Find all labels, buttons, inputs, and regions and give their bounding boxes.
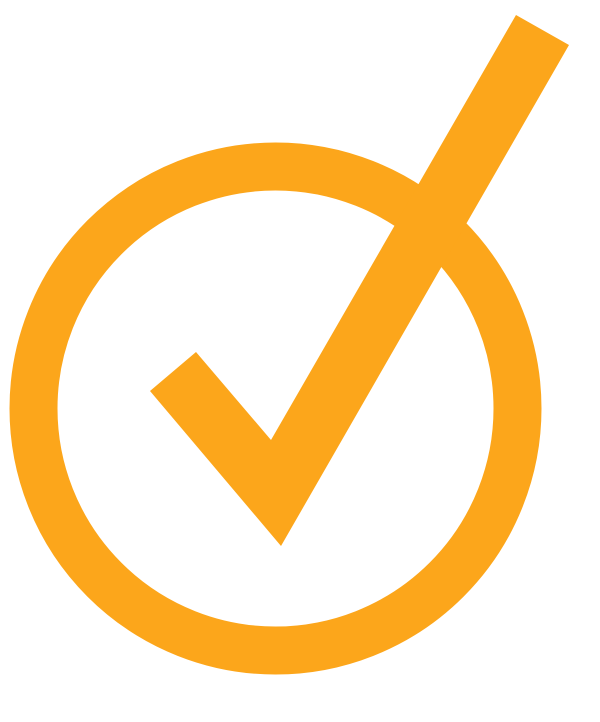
- icon: circle ring: [34, 166, 518, 650]
- icon: check mark: [150, 15, 569, 546]
- icon: check mark in circle: [34, 15, 569, 650]
